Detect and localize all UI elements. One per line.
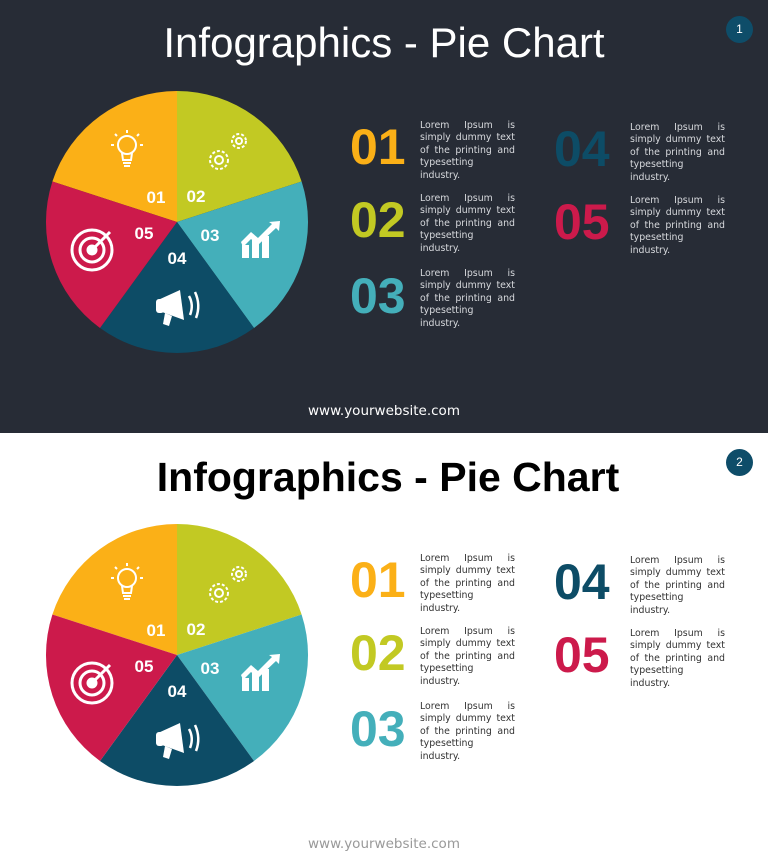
- slide 1: dark: simply dummy text: [420, 205, 515, 216]
- slide 2: light: Lorem Ipsum is: [630, 628, 725, 639]
- title: Infographics - Pie Chart: [163, 19, 605, 66]
- slide 2: light: typesetting: [420, 663, 473, 674]
- item 03: 03: [350, 268, 406, 324]
- page badge: [726, 449, 753, 476]
- slide 2: light: typesetting: [420, 590, 473, 601]
- item 04: 04: [554, 121, 610, 177]
- page badge: [726, 16, 753, 43]
- slide 1: dark: Lorem Ipsum is: [630, 122, 725, 133]
- slide 2: light: industry.: [420, 751, 460, 762]
- page badge: 2: [736, 455, 743, 469]
- slide 1: dark: industry.: [420, 243, 460, 254]
- item 05: 05: [554, 194, 610, 250]
- slide 2: light: Lorem Ipsum is: [630, 555, 725, 566]
- slide 2: light: Lorem Ipsum is: [420, 626, 515, 637]
- pie chart: 03: [201, 659, 219, 678]
- item 05: 05: [554, 627, 610, 683]
- pie chart: 02: [187, 187, 205, 206]
- slide 2: light: of the printing and: [630, 653, 725, 664]
- pie chart: 05: [135, 657, 153, 676]
- footer: www.yourwebsite.com: [308, 403, 460, 419]
- slide 1: dark: Lorem Ipsum is: [420, 193, 515, 204]
- slide 2: light: of the printing and: [420, 651, 515, 662]
- slide 2: light: industry.: [420, 603, 460, 614]
- item 01: 01: [350, 119, 406, 175]
- slide 1: dark: typesetting: [420, 305, 473, 316]
- slide 2: light: typesetting: [420, 738, 473, 749]
- slide 1: dark: simply dummy text: [420, 132, 515, 143]
- slide 1: dark: simply dummy text: [420, 280, 515, 291]
- slide 1: dark: industry.: [420, 318, 460, 329]
- slide 1: dark: typesetting: [420, 230, 473, 241]
- pie chart: 01: [147, 188, 165, 207]
- pie chart: 01: [147, 621, 165, 640]
- slide 1: dark: of the printing and: [420, 145, 515, 156]
- slide 2: light: typesetting: [630, 665, 683, 676]
- pie chart: 05: [135, 224, 153, 243]
- slide 1: dark: Lorem Ipsum is: [420, 268, 515, 279]
- slide 1: dark: simply dummy text: [630, 134, 725, 145]
- slide 1: dark: Lorem Ipsum is: [420, 120, 515, 131]
- slide 2: light: Lorem Ipsum is: [420, 553, 515, 564]
- slide 1: dark: typesetting: [630, 232, 683, 243]
- item 02: 02: [350, 625, 406, 681]
- title: Infographics - Pie Chart: [157, 454, 619, 500]
- item 01: 01: [350, 552, 406, 608]
- footer: www.yourwebsite.com: [308, 836, 460, 852]
- page badge: 1: [736, 22, 743, 36]
- slide 2: light: industry.: [630, 678, 670, 689]
- slide 1: dark: of the printing and: [420, 293, 515, 304]
- slide 1: dark: [0, 0, 768, 433]
- pie chart: [46, 524, 308, 786]
- item 02: 02: [350, 192, 406, 248]
- slide 1: dark: typesetting: [630, 159, 683, 170]
- slide 2: light: of the printing and: [630, 580, 725, 591]
- slide 1: dark: industry.: [420, 170, 460, 181]
- item 04: 04: [554, 554, 610, 610]
- slide 1: dark: Lorem Ipsum is: [630, 195, 725, 206]
- slide 2: light: industry.: [630, 605, 670, 616]
- slide 2: light: simply dummy text: [630, 567, 725, 578]
- slide 2: light: of the printing and: [420, 578, 515, 589]
- pie chart: 02: [187, 620, 205, 639]
- item 03: 03: [350, 701, 406, 757]
- slide 2: light: simply dummy text: [420, 565, 515, 576]
- slide 1: dark: simply dummy text: [630, 207, 725, 218]
- slide 2: light: simply dummy text: [630, 640, 725, 651]
- slide 2: light: simply dummy text: [420, 713, 515, 724]
- pie chart: 04: [168, 682, 187, 701]
- slide 1: dark: of the printing and: [420, 218, 515, 229]
- slide 1: dark: typesetting: [420, 157, 473, 168]
- pie chart: [46, 91, 308, 353]
- slide 2: light: of the printing and: [420, 726, 515, 737]
- slide 1: dark: industry.: [630, 245, 670, 256]
- pie chart: 04: [168, 249, 187, 268]
- slide 1: dark: of the printing and: [630, 147, 725, 158]
- slide 1: dark: industry.: [630, 172, 670, 183]
- slide 2: light: typesetting: [630, 592, 683, 603]
- pie chart: 03: [201, 226, 219, 245]
- slide 2: light: [0, 433, 768, 866]
- slide 1: dark: of the printing and: [630, 220, 725, 231]
- slide 2: light: Lorem Ipsum is: [420, 701, 515, 712]
- slide 2: light: industry.: [420, 676, 460, 687]
- slide 2: light: simply dummy text: [420, 638, 515, 649]
